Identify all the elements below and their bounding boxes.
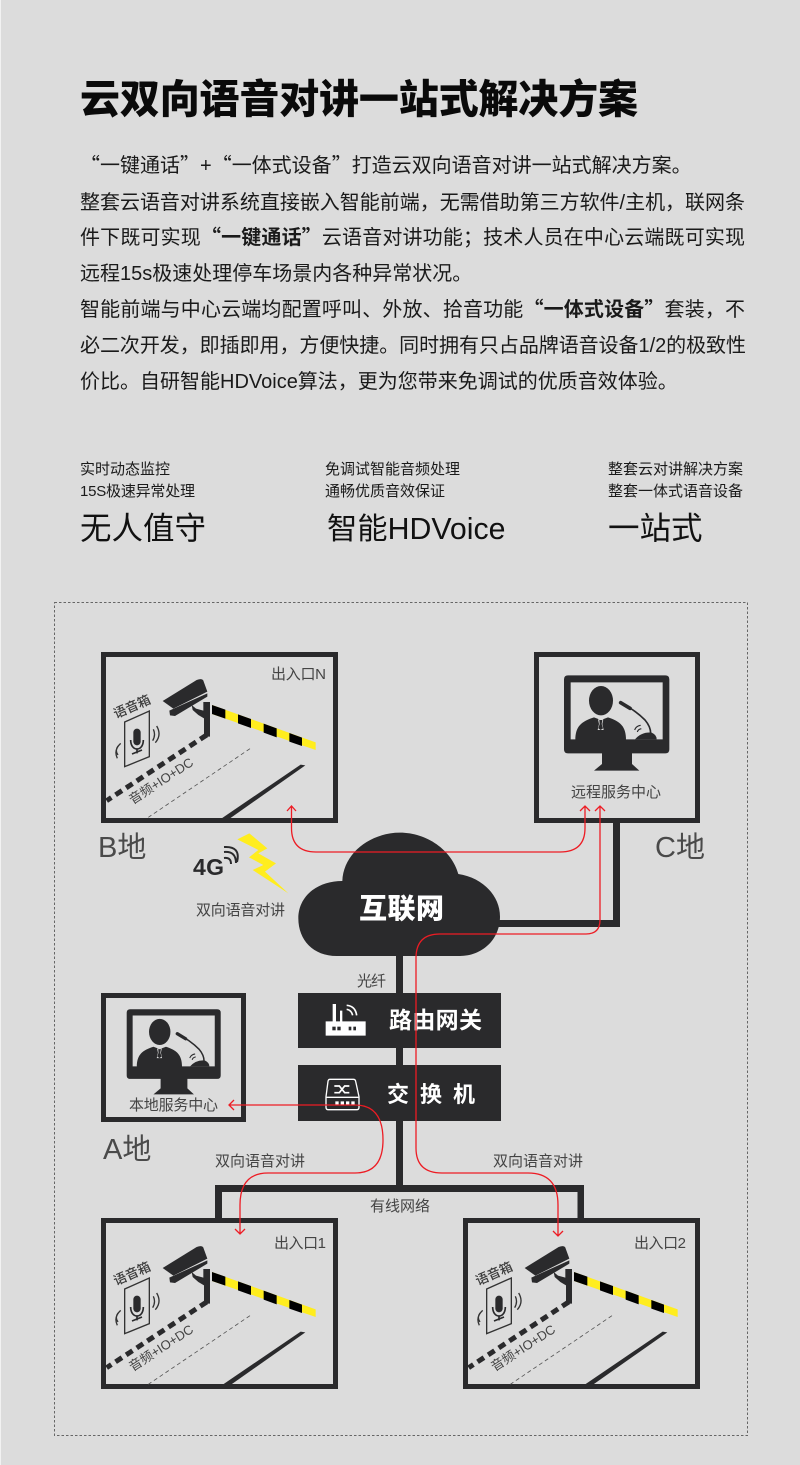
text block: introduction: 整套云语音对讲系统直接嵌入智能前端，无需借助第三方软件/主机，联网条 xyxy=(80,191,745,214)
scene: entrance 2: 音频+IO+DC xyxy=(488,1322,558,1374)
scene: entrance N: 音频+IO+DC xyxy=(126,755,196,807)
label: A site: A地 xyxy=(103,1133,151,1166)
label: fiber: 光纤 xyxy=(357,973,386,990)
text block: introduction: 件下既可实现“一键通话”云语音对讲功能；技术人员在中心云端既可实现 xyxy=(80,221,745,250)
icon: 4G signal xyxy=(193,847,238,880)
text block: introduction: 智能前端与中心云端均配置呼叫、外放、拾音功能“一体式设备”套装，不 xyxy=(80,293,745,322)
site box: entrance 2: 出入口2 xyxy=(634,1235,686,1252)
scene: entrance 1 xyxy=(107,1246,316,1385)
site box: entrance 1: 出入口1 xyxy=(274,1235,326,1252)
scene: entrance N: 语音箱 xyxy=(111,692,153,721)
scene: entrance 1: 语音箱 xyxy=(111,1259,153,1288)
icon: monitor with operator xyxy=(564,675,669,771)
site box: remote service center xyxy=(536,654,698,820)
text block: introduction: “一键通话”+“一体式设备”打造云双向语音对讲一站式解决方案。 xyxy=(80,149,692,178)
site box: entrance N: 出入口N xyxy=(271,666,326,683)
cloud: internet: 互联网 xyxy=(359,893,444,924)
scene: entrance 2: 语音箱 xyxy=(473,1259,515,1288)
icon: 4G signal: 4G xyxy=(193,854,224,880)
feature: unattended: 无人值守 xyxy=(80,510,206,546)
icon: router xyxy=(326,1004,366,1036)
site box: local service center: 本地服务中心 xyxy=(129,1097,218,1114)
icon: switch xyxy=(326,1079,359,1110)
label: left two-way intercom: 双向语音对讲 xyxy=(215,1153,305,1170)
scene: entrance 1: 音频+IO+DC xyxy=(126,1322,196,1374)
feature: unattended xyxy=(80,461,206,546)
text block: introduction: 远程15s极速处理停车场景内各种异常状况。 xyxy=(80,262,472,285)
arrow: local center to entrance 1 xyxy=(229,1100,383,1234)
site box: entrance 1 xyxy=(104,1220,336,1386)
text block: introduction: 必二次开发，即插即用，方便快捷。同时拥有只占品牌语音设备1/2的极致性 xyxy=(80,334,746,357)
cloud: internet xyxy=(298,833,500,956)
site box: entrance N xyxy=(104,654,336,820)
label: C site: C地 xyxy=(655,831,705,864)
feature: HDVoice: 智能HDVoice xyxy=(327,512,505,546)
icon: lightning bolt xyxy=(237,833,288,893)
feature: one-stop xyxy=(608,460,743,546)
site box: remote service center: 远程服务中心 xyxy=(571,784,661,801)
site box: local service center xyxy=(104,996,244,1120)
text block: introduction xyxy=(80,149,746,393)
site box: entrance 2 xyxy=(466,1220,698,1386)
switch box xyxy=(298,1065,501,1121)
wired network lines xyxy=(215,820,620,1220)
router gateway box xyxy=(298,993,501,1048)
feature: HDVoice xyxy=(325,460,505,546)
title: 云双向语音对讲一站式解决方案 xyxy=(80,77,638,122)
feature: unattended: 实时动态监控 xyxy=(80,461,170,478)
router gateway box: 路由网关 xyxy=(389,1007,482,1033)
arrow: remote center to entrance 2 xyxy=(416,806,605,1236)
scene: entrance 2 xyxy=(469,1246,678,1385)
icon: monitor with operator xyxy=(127,1009,221,1094)
label: right two-way intercom: 双向语音对讲 xyxy=(493,1153,583,1170)
arrow: entrance N to remote center xyxy=(287,806,590,852)
feature: one-stop: 一站式 xyxy=(608,510,703,546)
text block: introduction: 价比。自研智能HDVoice算法，更为您带来免调试的优质音效体验。 xyxy=(80,370,678,393)
label: B site: B地 xyxy=(98,831,146,864)
feature: one-stop: 整套云对讲解决方案 xyxy=(608,460,743,478)
feature: one-stop: 整套一体式语音设备 xyxy=(608,483,743,500)
label: wired network: 有线网络 xyxy=(370,1198,430,1215)
feature: HDVoice: 通畅优质音效保证 xyxy=(325,483,445,500)
feature: HDVoice: 免调试智能音频处理 xyxy=(325,460,460,478)
label: 4G two-way intercom: 双向语音对讲 xyxy=(196,902,285,919)
feature: unattended: 15S极速异常处理 xyxy=(80,483,195,500)
diagram frame xyxy=(54,602,748,1436)
scene: entrance N xyxy=(107,679,316,818)
switch box: 交 换 机 xyxy=(387,1082,475,1107)
